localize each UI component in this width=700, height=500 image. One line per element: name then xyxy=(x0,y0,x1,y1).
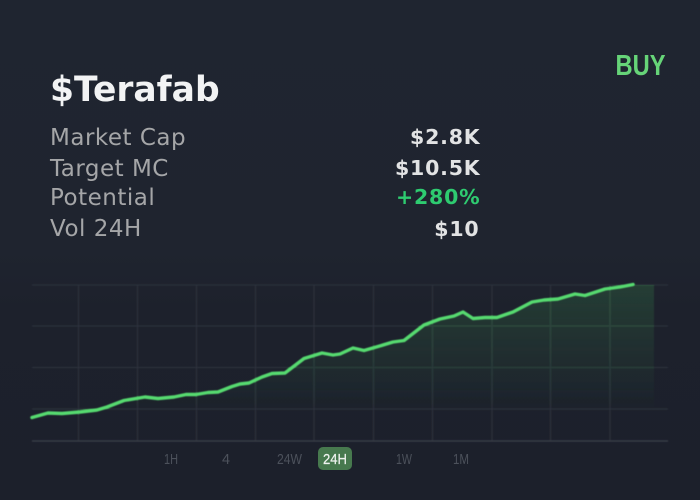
stat values: +280% xyxy=(396,185,480,209)
stat labels: Target MC xyxy=(49,156,169,182)
timeframe labels xyxy=(164,452,469,468)
stat values: $2.8K xyxy=(410,125,481,149)
active timeframe pill xyxy=(318,447,352,470)
timeframe labels: 24W xyxy=(277,452,302,468)
stat values xyxy=(395,125,481,241)
buy badge: BUY xyxy=(616,50,666,82)
timeframe labels: 1H xyxy=(164,452,178,468)
timeframe labels: 4 xyxy=(222,452,230,468)
title: $Terafab xyxy=(50,70,220,110)
line chart xyxy=(32,282,668,441)
stat labels: Vol 24H xyxy=(50,216,142,242)
active timeframe pill: 24H xyxy=(323,452,347,468)
stat labels xyxy=(49,125,186,242)
stat values: $10.5K xyxy=(395,156,481,180)
stat labels: Potential xyxy=(50,185,155,211)
timeframe labels: 1W xyxy=(396,452,412,468)
timeframe labels: 1M xyxy=(453,452,469,468)
stat labels: Market Cap xyxy=(50,125,186,151)
stat values: $10 xyxy=(434,217,480,241)
